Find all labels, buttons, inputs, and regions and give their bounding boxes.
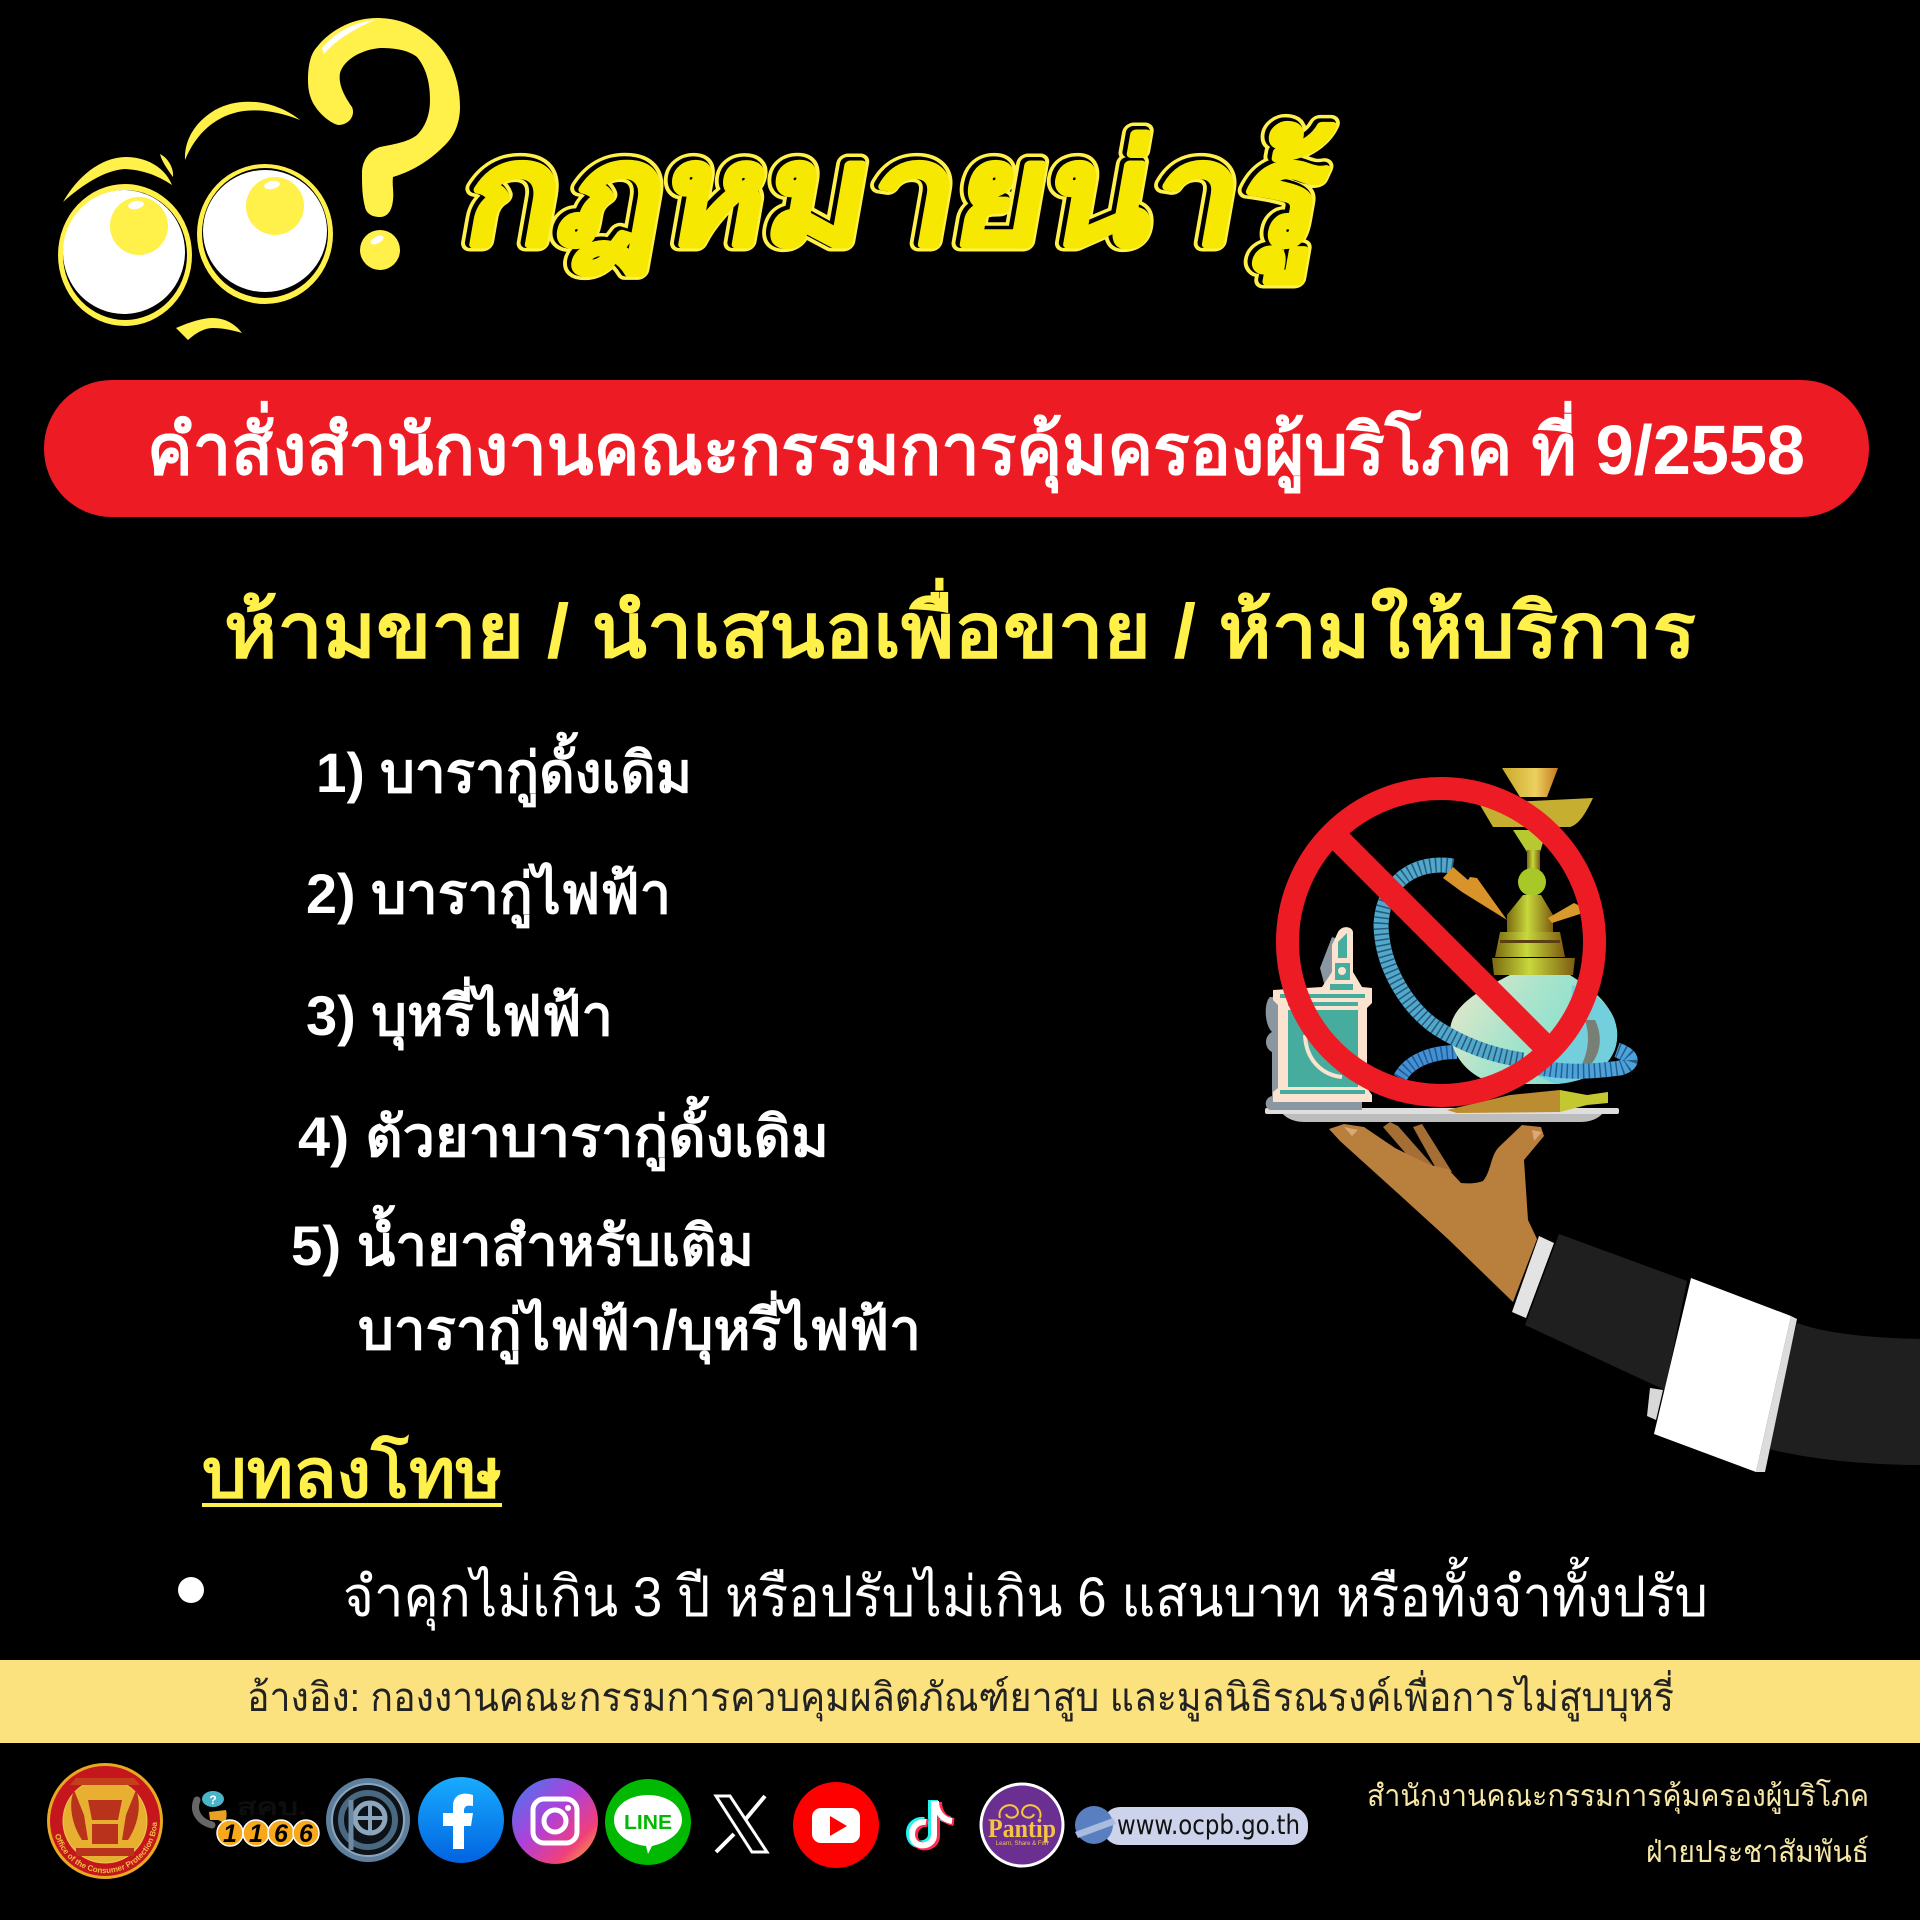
fingertips bbox=[1344, 1127, 1542, 1141]
tray bbox=[1265, 1108, 1619, 1122]
left eye bbox=[58, 184, 192, 326]
icon: Pantip: Pantip bbox=[988, 1814, 1056, 1843]
icon: LINE: LINE bbox=[624, 1812, 672, 1834]
footer logos bbox=[47, 1763, 1308, 1879]
bullet bbox=[178, 1577, 204, 1603]
title: กฎหมายน่ารู้ bbox=[451, 114, 1337, 279]
item 4: 4) ตัวยาบารากู่ดั้งเดิม bbox=[298, 1096, 829, 1172]
illustration: hand serving hookah and vape on tray bbox=[1265, 768, 1920, 1472]
website pill bbox=[1075, 1806, 1308, 1845]
hookah handle bbox=[1447, 1090, 1608, 1113]
side valve bbox=[1548, 903, 1580, 923]
icon: curious eyes with question mark bbox=[58, 18, 460, 340]
mouth mark bbox=[176, 318, 242, 340]
icon: hotline 1766: 6 bbox=[299, 1820, 314, 1848]
hookah hose rear bbox=[1400, 1052, 1457, 1078]
icon: LINE bbox=[605, 1779, 691, 1865]
hand bbox=[1329, 1124, 1544, 1302]
eyebrow flick bbox=[160, 154, 173, 177]
question highlight bbox=[322, 20, 375, 54]
icon: hotline 1766: ? bbox=[209, 1793, 217, 1807]
question dot bbox=[360, 230, 400, 270]
hookah hose bbox=[1381, 865, 1523, 1060]
icon: Pantip: Learn, Share & Fun bbox=[996, 1841, 1048, 1847]
hookah stem and bowl bbox=[1480, 768, 1593, 975]
website pill: www.ocpb.go.th bbox=[1117, 1810, 1300, 1841]
footer agency name bbox=[1367, 1778, 1869, 1869]
back fingers bbox=[1383, 1122, 1452, 1172]
reference band bbox=[0, 1660, 1920, 1743]
agency line 1: สำนักงานคณะกรรมการคุ้มครองผู้บริโภค bbox=[1367, 1778, 1869, 1815]
icon: hotline 1766: 1 bbox=[223, 1820, 237, 1848]
list of prohibited products bbox=[291, 732, 921, 1365]
icon: agency seal bbox=[47, 1763, 163, 1879]
icon: Facebook bbox=[418, 1777, 504, 1863]
right eye bbox=[197, 164, 333, 304]
icon: hotline 1766: 1 bbox=[249, 1820, 263, 1848]
title: กฎหมายน่ารู้ bbox=[454, 116, 1340, 281]
icon: Pantip bbox=[981, 1784, 1063, 1866]
hookah flask bbox=[1450, 975, 1617, 1084]
question mark bbox=[308, 18, 460, 217]
under cuff bbox=[1647, 1388, 1663, 1420]
icon: Instagram bbox=[512, 1778, 598, 1864]
item 5: 5) น้ำยาสำหรับเติม bbox=[291, 1205, 754, 1277]
vape bottle bbox=[1266, 927, 1372, 1110]
faint agency wordmark: สคบ. bbox=[237, 1794, 307, 1821]
icon: OCPB logo bbox=[326, 1778, 410, 1862]
item 5 continued: บารากู่ไฟฟ้า/บุหรี่ไฟฟ้า bbox=[358, 1290, 921, 1365]
prohibition sign bbox=[1288, 788, 1594, 1096]
large cuff side bbox=[1756, 1316, 1797, 1472]
hookah hose front bbox=[1523, 1050, 1630, 1071]
title: กฎหมายน่ารู้ bbox=[451, 114, 1337, 279]
large white cuff bbox=[1654, 1278, 1791, 1472]
left eyebrow bbox=[63, 157, 172, 202]
icon: YouTube bbox=[793, 1782, 879, 1868]
shirt cuff bbox=[1512, 1236, 1554, 1318]
banner text: คำสั่งสำนักงานคณะกรรมการคุ้มครองผู้บริโภค ที่ 9/2558 bbox=[147, 400, 1805, 494]
forearm sleeve bbox=[1525, 1234, 1687, 1390]
icon: hotline 1766: 6 bbox=[274, 1820, 289, 1848]
upper eyebrow bbox=[185, 102, 300, 160]
penalty text: จำคุกไม่เกิน 3 ปี หรือปรับไม่เกิน 6 แสนบาท หรือทั้งจำทั้งปรับ bbox=[343, 1557, 1708, 1631]
heading: prohibition: ห้ามขาย / นำเสนอเพื่อขาย / ห้ามให้บริการ bbox=[224, 577, 1696, 674]
icon: agency seal: Office of the Consumer Protection Board bbox=[56, 1822, 158, 1874]
arm rear sleeve bbox=[1765, 1323, 1920, 1465]
icon: hotline 1766 bbox=[195, 1791, 319, 1848]
mouthpiece bbox=[1443, 867, 1507, 920]
heading: penalties: บทลงโทษ bbox=[202, 1434, 502, 1512]
item 2: 2) บารากู่ไฟฟ้า bbox=[306, 861, 671, 929]
icon: X bbox=[716, 1796, 767, 1852]
reference text: อ้างอิง: กองงานคณะกรรมการควบคุมผลิตภัณฑ์ยาสูบ และมูลนิธิรณรงค์เพื่อการไม่สูบบุหรี่ bbox=[247, 1670, 1674, 1722]
agency line 2: ฝ่ายประชาสัมพันธ์ bbox=[1646, 1835, 1869, 1869]
panel: order number banner bbox=[44, 380, 1869, 517]
item 3: 3) บุหรี่ไฟฟ้า bbox=[306, 976, 613, 1051]
item 1: 1) บารากู่ดั้งเดิม bbox=[316, 732, 692, 808]
icon: TikTok bbox=[910, 1800, 954, 1846]
